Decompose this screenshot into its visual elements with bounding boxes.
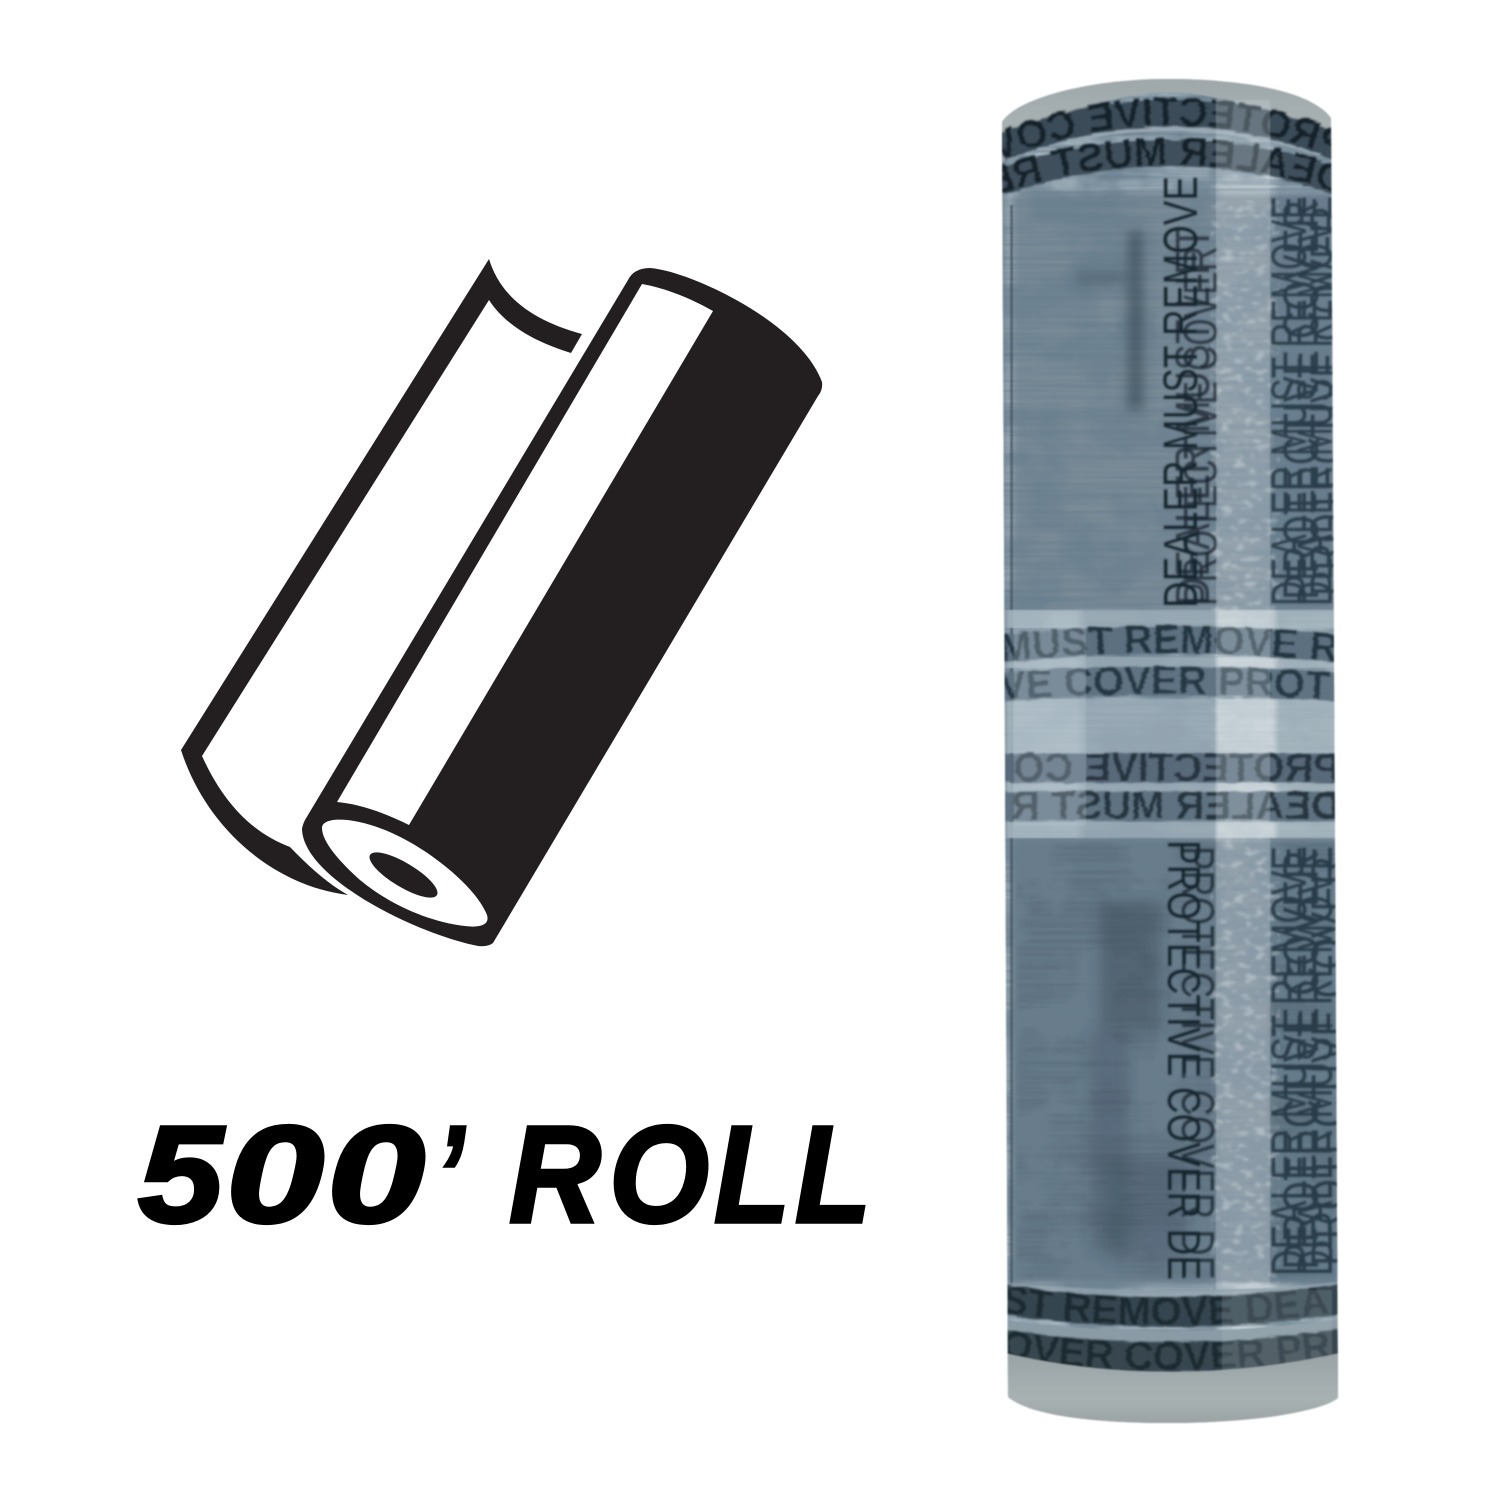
- vertical print: dealer must remove, upper: DEALER MUST LIFT: [1167, 226, 1220, 606]
- roll bottom rim: [1006, 1352, 1339, 1424]
- title: 500' ROLL: ’: [436, 1098, 465, 1252]
- icon: white highlight band: [337, 284, 713, 825]
- gap above bottom bands: [1000, 1285, 1340, 1294]
- vertical print: protective cover, lower: PROTECTIVE COVER DE: [1172, 846, 1224, 1280]
- vertical print: dealer must remove, upper: PROTECTIVE COVER: [1175, 246, 1228, 606]
- infographic canvas: [137, 78, 1339, 1424]
- vertical print: upper right column: PROTECTIVE COVER: [1300, 206, 1356, 596]
- printed band: bottom cover: [1006, 1328, 1339, 1372]
- icon: roll end cap: [322, 820, 488, 927]
- vertical print: upper right column: PROTECTIVE COVER: [1273, 200, 1329, 600]
- title: 500' ROLL: 5: [138, 1098, 225, 1252]
- vertical print: lower right column: PROTECTIVE COVER: [1301, 856, 1357, 1266]
- vertical print: dealer must remove, upper: DEALER MUST REMOVE: [1155, 176, 1208, 608]
- dark ghost print marks: [1075, 230, 1185, 1260]
- icon: paper roll: [181, 259, 822, 946]
- vertical print: lower right column: DEALER MUST REMOVE: [1261, 846, 1317, 1276]
- lower printed panel: [1012, 838, 1340, 1283]
- product photo: film roll: [1000, 78, 1339, 1424]
- film blotch and streak texture: [1000, 70, 1345, 1430]
- icon: core hole: [364, 845, 443, 905]
- vertical print: lower right column: [1270, 846, 1338, 1274]
- printed band: REMOVE: [1004, 623, 1335, 664]
- highlight column wash on bottom bands: [1222, 1290, 1332, 1375]
- vertical print: lower right column: PROTECTIVE COVER: [1273, 850, 1329, 1270]
- vertical print: lower right column: DEALER MUST REMOVE: [1287, 846, 1343, 1276]
- vertical print: upper right column: DEALER MUST REMOVE: [1287, 196, 1343, 606]
- left lighter column wash: [1014, 626, 1086, 826]
- roll base: [1000, 70, 1345, 1430]
- film panel left edge: [1010, 205, 1013, 1285]
- title: 500' ROLL: 0: [327, 1098, 425, 1252]
- gap between bottom bands: [1000, 1324, 1340, 1336]
- icon: roll body: [302, 268, 822, 946]
- top rim: [1002, 79, 1332, 134]
- printed band: COVER: [1004, 664, 1335, 702]
- printed band: bottom remove: [1006, 1283, 1338, 1329]
- highlight column speckle: [1216, 250, 1270, 1250]
- title: 500' ROLL: O: [609, 1098, 709, 1252]
- icon: unrolled sheet outline: [181, 259, 582, 895]
- upper printed panel: [1012, 192, 1336, 612]
- title: 500' ROLL: R: [509, 1098, 601, 1252]
- vertical print: protective cover, lower: [1166, 842, 1216, 1280]
- vertical print: protective cover, lower: PROTECTIVE COVER DE: [1158, 840, 1210, 1280]
- title: 500' ROLL: L: [714, 1098, 790, 1252]
- vertical print: upper right column: DEALER MUST REMOVE: [1261, 196, 1317, 606]
- vertical print: upper right column: [1270, 196, 1334, 604]
- highlight column wash: [1216, 100, 1270, 1290]
- title: 500' ROLL: 0: [226, 1098, 324, 1252]
- printed band: top 2: [1001, 136, 1332, 195]
- title: 500' ROLL: L: [795, 1098, 871, 1252]
- gap between top bands: [1000, 124, 1340, 155]
- light gap stripes: [1000, 610, 1345, 838]
